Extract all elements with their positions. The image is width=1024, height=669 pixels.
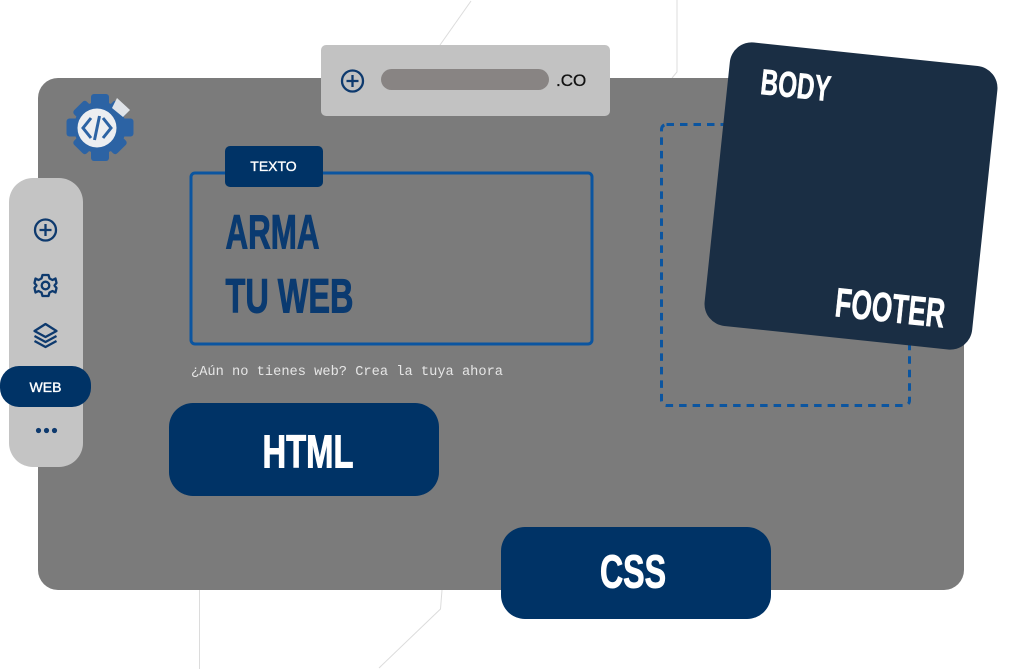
icon: settings (34, 275, 56, 296)
icon: add (342, 70, 363, 92)
gear body (66, 94, 134, 161)
icon: layers (34, 324, 56, 347)
label: footer: FOOTER (833, 279, 947, 337)
tab: texto (225, 146, 323, 187)
button: css (501, 527, 771, 619)
panel: side toolbar (0, 178, 91, 467)
heading: ARMA (226, 206, 320, 260)
thin background connector lines (200, 0, 677, 669)
domain label: .CO (556, 71, 586, 90)
url field (381, 69, 549, 90)
tab: web: WEB (30, 379, 61, 395)
icon: code gear (66, 94, 134, 161)
icon: more dots (36, 428, 57, 433)
card: body and footer (702, 40, 1000, 352)
button: html: HTML (262, 426, 354, 478)
panel: address bar (321, 45, 610, 116)
panel: text box (191, 146, 592, 344)
icon: small note (112, 98, 130, 117)
browser window panel (38, 78, 964, 590)
tab: texto: TEXTO (250, 158, 297, 174)
button: css: CSS (600, 546, 666, 598)
heading: TU WEB (226, 270, 354, 324)
button: html (169, 403, 439, 496)
heading (226, 206, 354, 324)
tagline: ¿Aún no tienes web? Crea la tuya ahora (191, 365, 503, 380)
tab: web (0, 366, 91, 407)
icon: add (35, 220, 56, 240)
label: body: BODY (759, 61, 833, 109)
dashed placeholder frame (662, 124, 910, 406)
